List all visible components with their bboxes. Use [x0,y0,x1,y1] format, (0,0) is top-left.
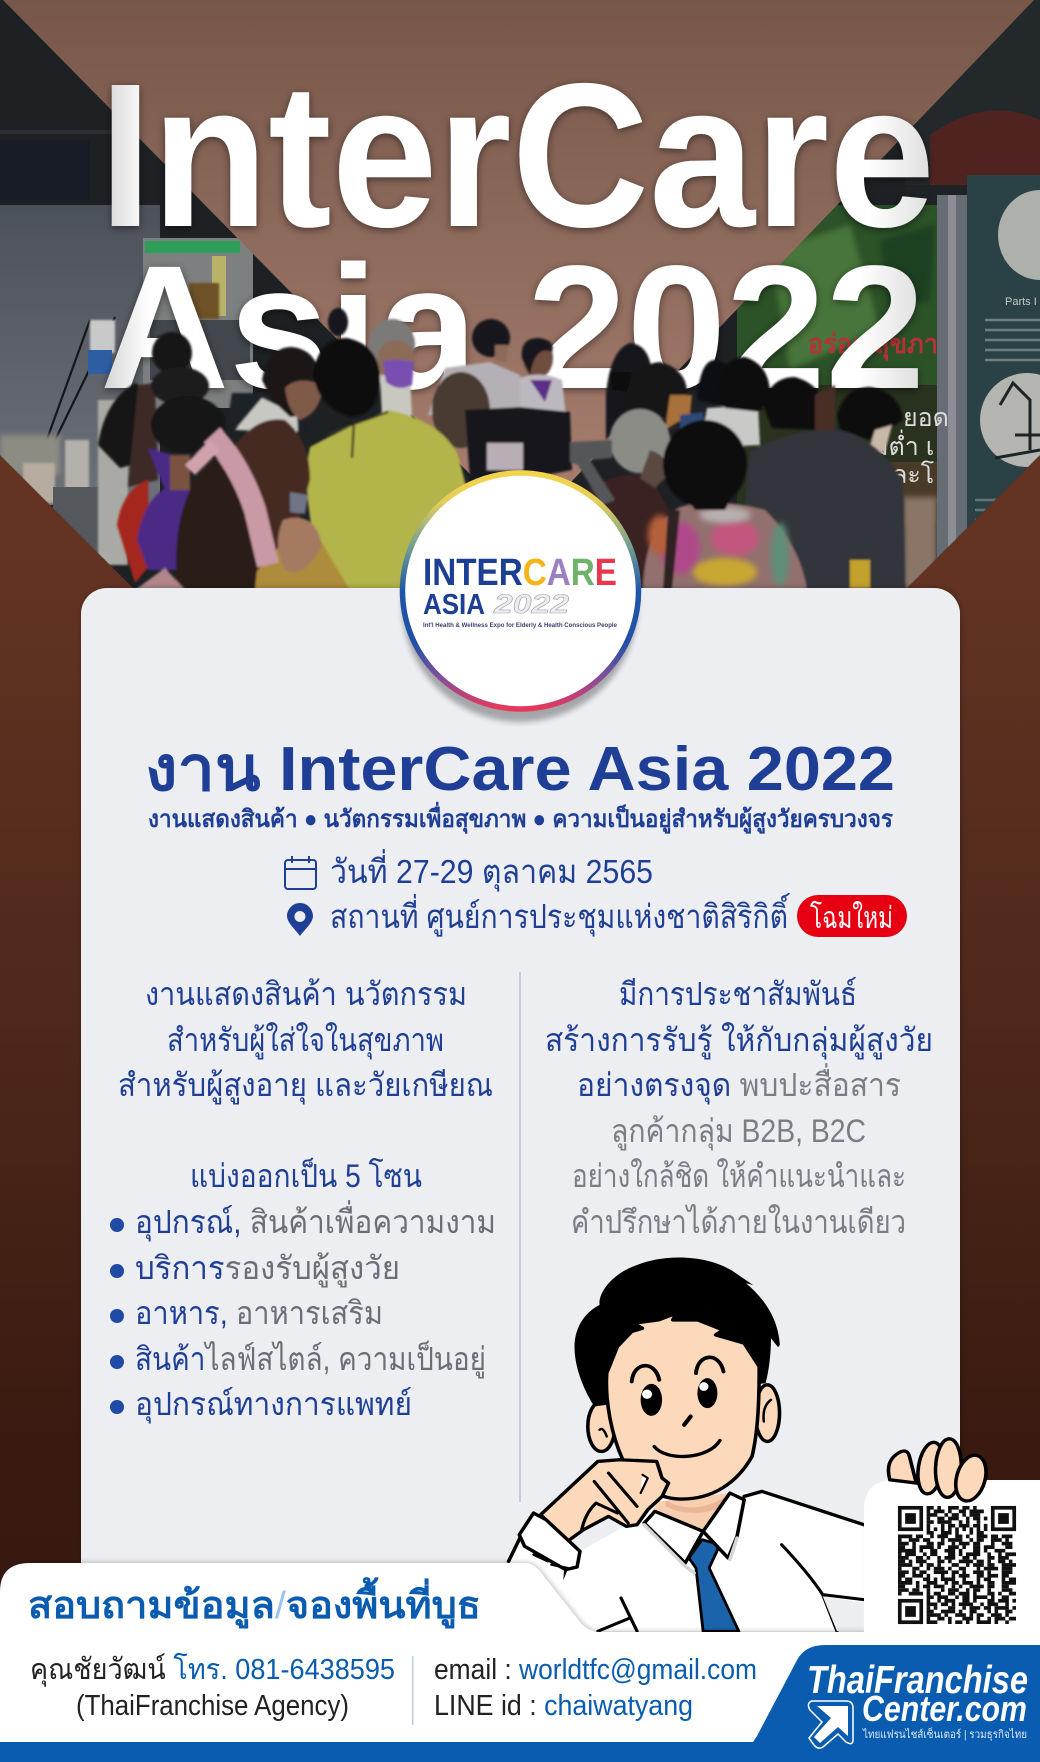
LINE id: LINE id : chaiwatyang [434,1690,693,1722]
title: InterCare Asia 2022: Asia 2022 [100,230,925,426]
photo backdrop: exhibition hall: ละโ [892,460,934,489]
left column: intro text: แบ่งออกเป็น 5 โซน [190,1157,422,1194]
icon: arrow [808,1701,853,1748]
agency name: (ThaiFranchise Agency) [76,1690,349,1722]
ponytail woman with pink hair accessory [135,419,350,590]
title: InterCare Asia 2022: InterCare [99,41,935,270]
right column text: คำปรึกษาได้ภายในงานเดียว [571,1204,906,1240]
floral shirt woman [643,503,807,590]
left column: intro text [118,976,493,1194]
right column text: สร้างการรับรู้ ให้กับกลุ่มผู้สูงวัย [545,1022,933,1060]
left group: bag and dark-haired women [98,332,225,583]
illustration: fingers holding QR card [888,1438,991,1504]
ThaiFranchise Center logo [753,1645,1040,1748]
logo year: 2022 [493,589,569,619]
contact person and phone: คุณชัยวัฒน์ โทร. 081-6438595 [30,1652,395,1687]
photo: crowd of visitors [98,308,905,590]
title: InterCare Asia 2022 [99,41,935,426]
email: email : worldtfc@gmail.com [434,1654,757,1686]
centre yellow shirt man [307,410,467,590]
venue text: สถานที่ ศูนย์การประชุมแห่งชาติสิริกิติ์ [330,893,790,937]
left column: zone bullet list: อุปกรณ์ทางการแพทย์ [135,1386,412,1424]
contact footer panel [0,1563,1040,1742]
photo backdrop: exhibition hall: Parts I [1005,296,1037,308]
photo backdrop: exhibition hall: ยอด [903,404,949,432]
left column: zone bullet list: อุปกรณ์, สินค้าเพื่อความงาม [135,1200,496,1242]
left column: intro text: สำหรับผู้สูงอายุ และวัยเกษียณ [118,1067,493,1105]
left column: intro text: งานแสดงสินค้า นวัตกรรม [145,976,467,1012]
right column text: ลูกค้ากลุ่ม B2B, B2C [611,1113,866,1151]
footer divider [412,1656,414,1725]
logo word ASIA: ASIA [423,589,485,621]
dark grey jacket man [745,430,905,590]
badge: new look [797,895,907,937]
photo backdrop: exhibition hall [0,0,1040,590]
right column text: มีการประชาสัมพันธ์ [619,976,857,1012]
left column: zone bullet list [110,1200,496,1424]
left column: zone bullet list: บริการรองรับผู้สูงวัย [135,1250,400,1288]
event logo badge [402,473,638,722]
main light panel [81,588,960,1648]
left column: intro text: สำหรับผู้ใส่ใจในสุขภาพ [167,1022,444,1060]
right column text [545,976,933,1240]
right column text: อย่างใกล้ชิด ให้คำแนะนำและ [572,1158,906,1194]
bottom blue bar [0,1742,1040,1762]
heading: งาน InterCare Asia 2022 [145,735,895,804]
illustration: cartoon businessman [509,1257,864,1631]
left column: zone bullet list: สินค้าไลฟ์สไตล์, ความเป็นอยู่ [135,1340,486,1379]
date text: วันที่ 27-29 ตุลาคม 2565 [330,849,653,892]
icon: location pin [287,903,313,936]
column divider [519,972,521,1502]
photo backdrop: exhibition hall: อร่อย สุขภา [808,329,938,361]
subheading: งานแสดงสินค้า ● นวัตกรรมเพื่อสุขภาพ ● ความเป็นอยู่สำหรับผู้สูงวัยครบวงจร [148,801,893,835]
logo word INTERCARE: INTERCARE [423,552,617,594]
photo backdrop: exhibition hall: มต่ำ เ [872,429,934,461]
contact heading: สอบถามข้อมูล /จองพื้นที่บูธ [28,1577,481,1629]
top brown triangle [3,0,1034,530]
left column: zone bullet list: อาหาร, อาหารเสริม [135,1295,383,1331]
QR card [864,1480,1040,1645]
right column text: อย่างตรงจุด พบปะสื่อสาร [577,1063,901,1105]
QR code [898,1508,1016,1622]
badge: new look: โฉมใหม่ [810,900,893,935]
icon: calendar [285,856,316,889]
video camera [465,407,615,505]
logo tagline: Int'l Health & Wellness Expo for Elderly & Health Conscious People [423,622,617,629]
